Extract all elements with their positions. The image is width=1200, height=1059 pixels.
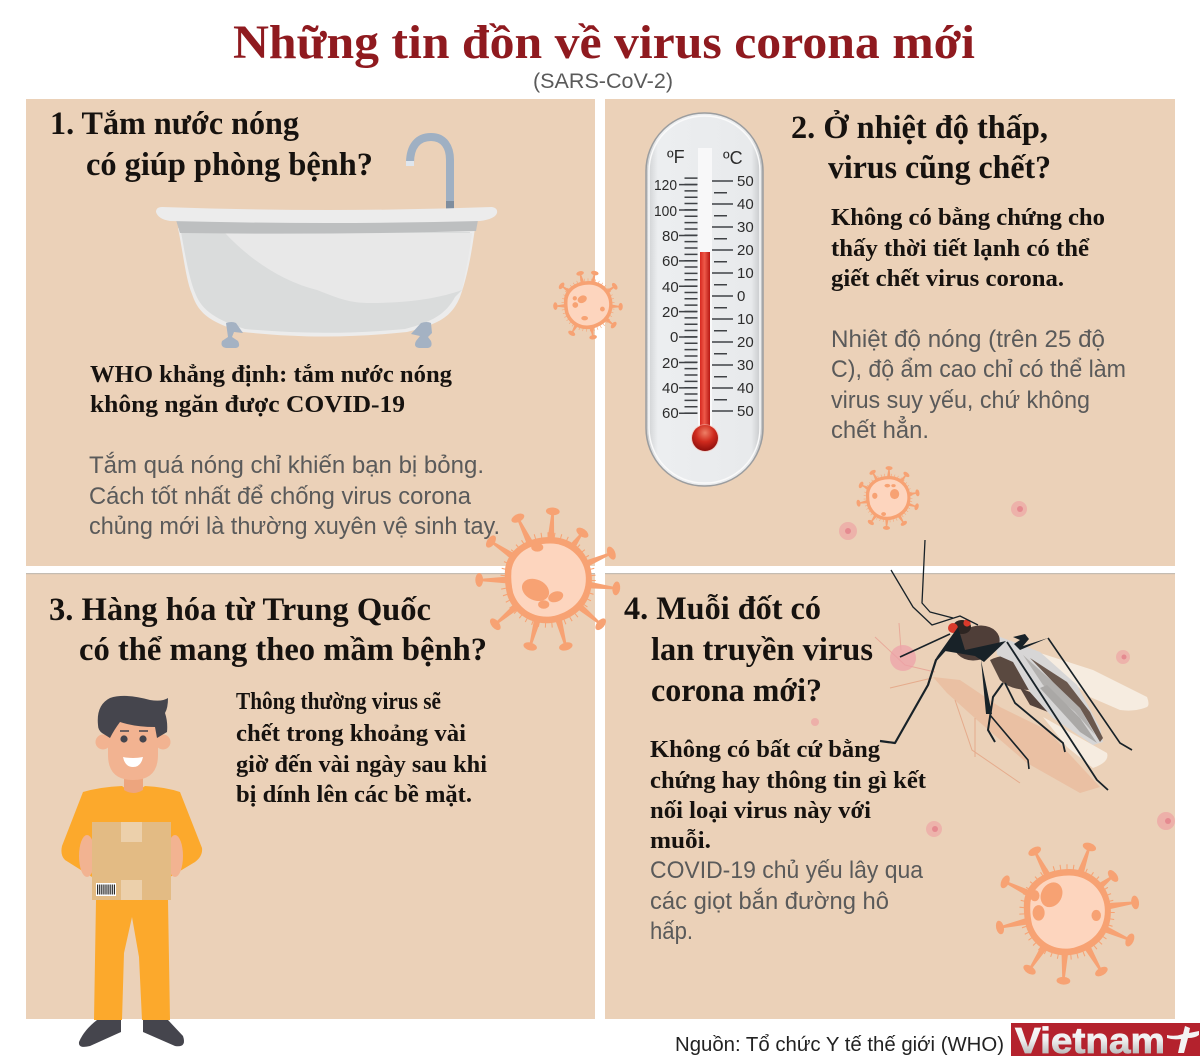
- heading 1: [50, 106, 373, 183]
- icon: thermometer: 80: [662, 228, 679, 245]
- text block: WHO statement: [90, 362, 452, 418]
- text block: hot bath detail: Tắm quá nóng chỉ khiến bạn bị bỏng.: [89, 452, 484, 479]
- title: Những tin đồn về virus corona mới: [233, 16, 975, 69]
- text block: mosquito statement: muỗi.: [650, 828, 711, 854]
- icon: thermometer: 50: [737, 403, 754, 420]
- text block: cold weather statement: thấy thời tiết lạnh có thể: [831, 236, 1090, 262]
- text block: virus survival: Thông thường virus sẽ: [236, 689, 441, 715]
- icon: bathtub: [156, 137, 497, 348]
- text block: mosquito statement: chứng hay thông tin gì kết: [650, 768, 926, 794]
- text block: temperature detail: C), độ ẩm cao chỉ có thể làm: [831, 356, 1126, 383]
- text block: cold weather statement: giết chết virus corona.: [831, 266, 1064, 292]
- heading 2: 2. Ở nhiệt độ thấp,: [791, 108, 1048, 146]
- panel: hot bath background: [26, 99, 595, 566]
- icon: thermometer: 30: [737, 219, 754, 236]
- text block: temperature detail: chết hẳn.: [831, 415, 929, 444]
- heading 2: [791, 108, 1051, 186]
- icon: small virus center: [553, 270, 623, 340]
- icon: thermometer: 120: [654, 177, 677, 194]
- icon: thermometer: 60: [662, 253, 679, 270]
- icon: thermometer: 10: [737, 265, 754, 282]
- text block: transmission detail: [650, 857, 924, 945]
- text block: cold weather statement: [831, 205, 1105, 292]
- icon: thermometer: 60: [662, 405, 679, 422]
- icon: large virus center: [475, 507, 621, 652]
- icon: pink cells: [811, 501, 1175, 837]
- heading 1: 1. Tắm nước nóng: [50, 106, 299, 142]
- icon: large virus bottom right: [995, 841, 1140, 985]
- text block: temperature detail: virus suy yếu, chứ không: [831, 387, 1090, 414]
- text block: transmission detail: COVID-19 chủ yếu lây qua: [650, 857, 924, 884]
- icon: mosquito: [875, 540, 1148, 793]
- icon: thermometer: [646, 113, 763, 486]
- text block: hot bath detail: [89, 452, 500, 540]
- icon: thermometer: 10: [737, 311, 754, 328]
- heading 2: virus cũng chết?: [828, 150, 1051, 186]
- icon: thermometer: 30: [737, 357, 754, 374]
- text block: virus survival: giờ đến vài ngày sau khi: [236, 752, 487, 778]
- source note: Nguồn: Tổ chức Y tế thế giới (WHO): [675, 1034, 1004, 1056]
- icon: thermometer: 20: [737, 334, 754, 351]
- icon: thermometer: 100: [654, 203, 677, 220]
- heading 3: có thể mang theo mầm bệnh?: [79, 632, 487, 668]
- subtitle: (SARS-CoV-2): [533, 70, 673, 93]
- icon: thermometer: 40: [737, 196, 754, 213]
- text block: temperature detail: Nhiệt độ nóng (trên 25 độ: [831, 326, 1105, 353]
- icon: thermometer: 50: [737, 173, 754, 190]
- text block: temperature detail: [831, 326, 1126, 444]
- icon: thermometer: 20: [662, 304, 679, 321]
- heading 3: [49, 592, 487, 668]
- icon: thermometer: ºC: [723, 148, 743, 168]
- text block: transmission detail: các giọt bắn đường hô: [650, 888, 889, 915]
- text block: WHO statement: không ngăn được COVID-19: [90, 392, 405, 418]
- icon: thermometer: 0: [737, 288, 745, 305]
- text block: virus survival: [236, 689, 487, 808]
- icon: thermometer: ºF: [667, 147, 685, 167]
- icon: small virus right: [856, 466, 920, 530]
- heading 4: lan truyền virus: [651, 632, 873, 668]
- heading 4: [624, 591, 873, 709]
- icon: thermometer: 0: [670, 329, 678, 346]
- text block: mosquito statement: Không có bất cứ bằng: [650, 737, 880, 763]
- text block: virus survival: chết trong khoảng vài: [236, 721, 466, 747]
- heading 3: 3. Hàng hóa từ Trung Quốc: [49, 592, 431, 628]
- panel: low temperature background: [605, 99, 1175, 566]
- text block: WHO statement: WHO khẳng định: tắm nước nóng: [90, 362, 452, 388]
- heading 4: corona mới?: [651, 673, 822, 709]
- text block: hot bath detail: chủng mới là thường xuyên vệ sinh tay.: [89, 513, 500, 540]
- text block: hot bath detail: Cách tốt nhất để chống virus corona: [89, 483, 472, 510]
- icon: man holding box: [61, 696, 202, 1047]
- icon: thermometer: 40: [662, 380, 679, 397]
- text block: virus survival: bị dính lên các bề mặt.: [236, 782, 472, 808]
- text block: mosquito statement: nối loại virus này với: [650, 798, 871, 824]
- text block: mosquito statement: [650, 737, 926, 854]
- panel: mosquito background: [605, 574, 1175, 1019]
- icon: thermometer: 40: [737, 380, 754, 397]
- text block: transmission detail: hấp.: [650, 918, 693, 945]
- icon: thermometer: 40: [662, 279, 679, 296]
- icon: thermometer: 20: [662, 355, 679, 372]
- icon: thermometer: 20: [737, 242, 754, 259]
- heading 4: 4. Muỗi đốt có: [624, 591, 821, 627]
- panel: goods from China background: [26, 574, 595, 1019]
- text block: cold weather statement: Không có bằng chứng cho: [831, 205, 1105, 231]
- heading 1: có giúp phòng bệnh?: [86, 147, 373, 183]
